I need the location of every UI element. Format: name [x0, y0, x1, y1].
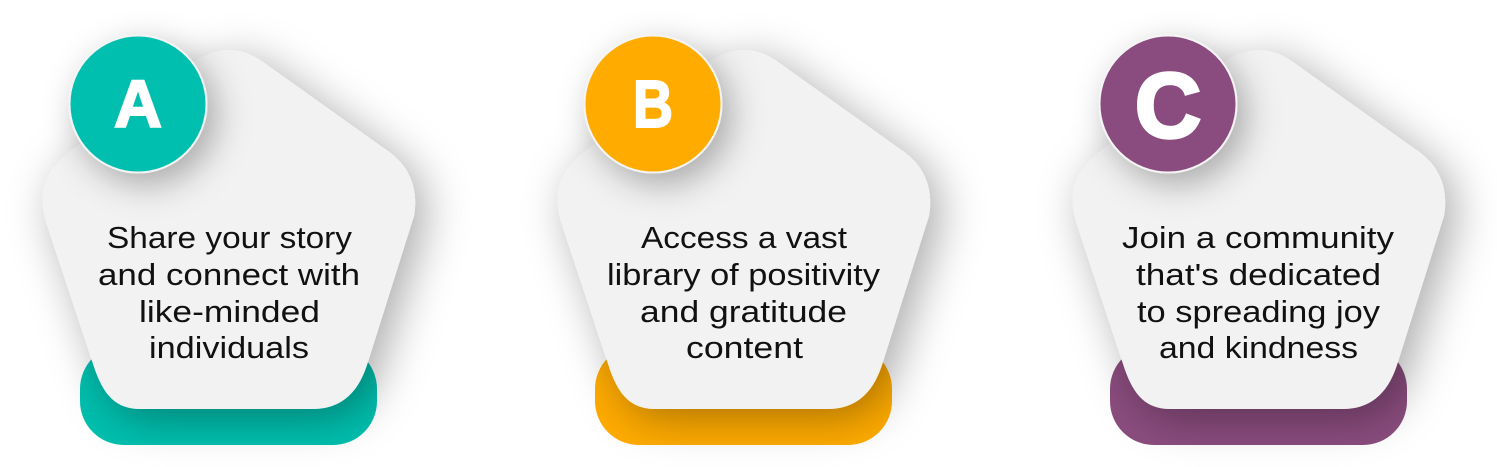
text: C: Join a community: [1122, 220, 1395, 255]
text: A: like-minded: [139, 294, 320, 329]
text: C: to spreading joy: [1137, 294, 1381, 329]
base: B: [595, 345, 892, 445]
badge: C: C: [1135, 55, 1201, 157]
text: B: Access a vast: [641, 220, 847, 255]
text: A: individuals: [149, 330, 309, 365]
text: A: and connect with: [98, 257, 360, 292]
pentagon card: A: [43, 50, 415, 409]
badge: C: [1100, 36, 1236, 172]
text: B: content: [686, 330, 803, 365]
badge: A: A: [114, 67, 162, 142]
panel A: [43, 36, 415, 445]
text: B: and gratitude: [640, 294, 847, 329]
panel C: [1073, 36, 1445, 445]
badge: B: [584, 36, 722, 172]
text: A: Share your story: [107, 220, 353, 255]
text: C: [1122, 220, 1395, 365]
base: A: [80, 345, 377, 445]
text: C: that's dedicated: [1136, 257, 1381, 292]
base: C: [1110, 345, 1407, 445]
text: B: library of positivity: [607, 257, 881, 292]
text: C: and kindness: [1159, 330, 1358, 365]
panel B: [558, 36, 930, 445]
pentagon card: B: [558, 50, 930, 409]
badge: B: B: [633, 67, 673, 142]
pentagon card: C: [1073, 50, 1445, 409]
text: A: [98, 220, 360, 365]
text: B: [607, 220, 881, 365]
badge: A: [70, 36, 206, 172]
